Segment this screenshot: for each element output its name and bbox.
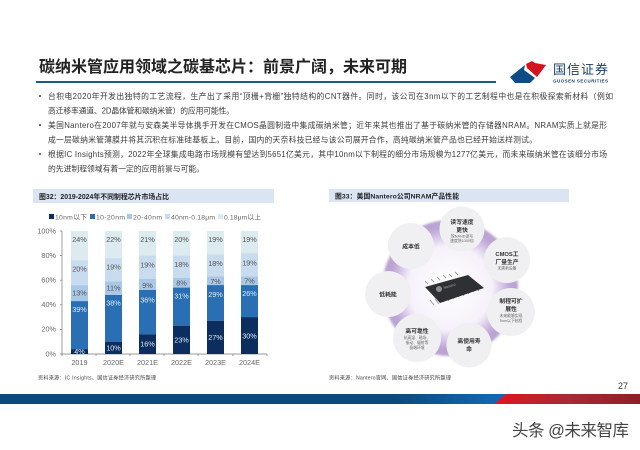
circle: process scalability: 未来能够实现 bbox=[500, 313, 523, 318]
title underline bbox=[36, 81, 496, 83]
diagram heading bbox=[329, 189, 569, 202]
bar: 2019: 13% bbox=[72, 288, 87, 298]
bar: 2022E: 8% bbox=[176, 278, 187, 288]
circle: high reliability: 振动、辐射等 bbox=[406, 340, 429, 345]
bar: 2024E: 26% bbox=[242, 289, 257, 298]
circle: read/write speed: 速度快1000倍 bbox=[450, 238, 474, 243]
circle: CMOS fab: 无需新设备 bbox=[498, 266, 517, 270]
circle: CMOS fab bbox=[484, 237, 530, 283]
logo: Guosen Securities: GUOSEN SECURITIES bbox=[553, 78, 608, 84]
bar: 2019: 24% bbox=[72, 235, 87, 244]
bar: 2023E: 7% bbox=[210, 277, 221, 286]
circle: process scalability: 制程可扩 bbox=[499, 297, 523, 305]
logo: Guosen Securities bbox=[510, 61, 608, 84]
circle: high reliability: 高可靠性 bbox=[405, 327, 429, 335]
bar: 2023E: 27% bbox=[208, 333, 223, 342]
bar: 2024E bbox=[241, 231, 258, 354]
legend: 0.18μm以上 bbox=[224, 212, 261, 222]
bar: 2020E: 19% bbox=[106, 262, 121, 272]
circle: read/write speed: 较NAND读写 bbox=[451, 234, 473, 238]
bar: 2019 bbox=[71, 231, 88, 356]
circle: long lifetime: 高使用寿 bbox=[457, 337, 481, 345]
bar: 2021E: 19% bbox=[140, 260, 155, 270]
bar: 2021E: 36% bbox=[140, 296, 155, 304]
circle: high reliability: 抗高温、磁场、 bbox=[404, 335, 430, 340]
bullet text block: 成一层碳纳米管薄膜并将其沉积在标准硅基板上。目前，国内的天奈科技已经与该公司展开合作，高纯碳纳米管产品也已经开始送样测试。 bbox=[48, 134, 537, 144]
y axis: 40% bbox=[41, 300, 57, 309]
bar: 2021E: 16% bbox=[140, 340, 155, 348]
purple glow bbox=[382, 220, 518, 356]
circle: low power: 低耗能 bbox=[379, 290, 397, 298]
icon: chip: Nantero bbox=[443, 282, 456, 290]
x axis: 2020E bbox=[103, 358, 124, 367]
bar: 2023E: 18% bbox=[208, 259, 223, 268]
bar: 2019: 20% bbox=[72, 264, 87, 274]
bar: 2021E bbox=[139, 231, 156, 354]
bar: 2022E: 31% bbox=[174, 292, 189, 300]
circle: long lifetime: 命 bbox=[466, 345, 472, 353]
bar: 2020E bbox=[105, 231, 122, 354]
circle: process scalability bbox=[487, 288, 535, 336]
circle: CMOS fab: 厂量生产 bbox=[495, 258, 519, 266]
x axis: 2021E bbox=[137, 358, 158, 367]
circle: CMOS fab: CMOS工 bbox=[495, 251, 519, 258]
y axis: 100% bbox=[37, 226, 57, 236]
circle: process scalability: 展性 bbox=[505, 305, 517, 313]
panel: NRAM diagram bbox=[329, 189, 569, 382]
x axis: 2023E bbox=[205, 358, 226, 367]
bar: 2019: 39% bbox=[72, 305, 87, 314]
bar: 2024E: 19% bbox=[242, 258, 257, 268]
x axis: 2019 bbox=[71, 358, 88, 367]
bullet text block: 根据IC Insights预测，2022年全球集成电路市场规模有望达到5651亿美元，其中10nm以下制程的细分市场规模为1277亿美元，而未来碳纳米管在该细分市场 bbox=[48, 149, 607, 159]
bar: 2021E: 9% bbox=[142, 281, 153, 290]
bar: 2023E: 29% bbox=[208, 290, 223, 299]
bar: 2023E: 19% bbox=[208, 235, 223, 244]
y axis: 60% bbox=[41, 276, 57, 284]
footer band bbox=[0, 394, 640, 404]
legend: 20-40nm bbox=[133, 214, 162, 222]
bar: 2020E: 10% bbox=[106, 344, 121, 352]
y axis: 20% bbox=[41, 324, 57, 334]
panel: chart 32 bbox=[33, 189, 274, 382]
logo: Guosen Securities: 国信证券 bbox=[553, 62, 608, 77]
circle: high reliability bbox=[393, 314, 441, 362]
y axis: 0% bbox=[45, 350, 57, 358]
x axis: 2024E bbox=[239, 358, 260, 367]
bullet text block bbox=[39, 91, 613, 174]
bullet text block: 美国Nantero在2007年就与安森美半导体携手开发在CMOS晶圆制造中集成碳纳米管；近年来其也推出了基于碳纳米管的存储器NRAM。NRAM实质上就是形 bbox=[48, 120, 607, 130]
watermark: 头条 @未来智库 bbox=[512, 421, 629, 440]
bar: 2022E: 20% bbox=[174, 235, 189, 244]
legend: 10nm以下 bbox=[55, 214, 87, 222]
bar: 2021E: 21% bbox=[140, 235, 155, 244]
page number: 27 bbox=[618, 381, 628, 391]
bar: 2019: 4% bbox=[74, 347, 85, 356]
y axis: 80% bbox=[41, 251, 57, 260]
chart heading bbox=[33, 189, 274, 203]
bullet text block: 的先进制程领域有着一定的应用前景与可能。 bbox=[48, 164, 204, 174]
bar: 2022E bbox=[173, 231, 190, 354]
circle: low power bbox=[365, 271, 411, 317]
circle: low cost bbox=[388, 223, 434, 269]
icon: chip bbox=[425, 272, 484, 305]
circle: read/write speed bbox=[440, 206, 484, 252]
circle: long lifetime bbox=[446, 322, 492, 368]
bar: 2020E: 11% bbox=[106, 284, 121, 292]
source note: 资料来源：Nantero官网、国信证券经济研究所整理 bbox=[329, 374, 452, 382]
bar: 2023E bbox=[207, 231, 224, 354]
bar: 2024E: 19% bbox=[242, 235, 257, 244]
circle: high reliability: 极端环境 bbox=[409, 345, 425, 350]
bar: 2022E: 18% bbox=[174, 260, 189, 269]
bar: 2020E: 38% bbox=[106, 298, 121, 308]
source note: 资料来源：IC Insights、国信证券经济研究所整理 bbox=[38, 374, 156, 382]
chart heading: 图32：2019-2024年不同制程芯片市场占比 bbox=[39, 192, 169, 201]
x axis: 2022E bbox=[171, 358, 192, 367]
diagram heading: 图33：美国Nantero公司NRAM产品性能 bbox=[335, 192, 459, 200]
bullet text block: 台积电2020年开发出独特的工艺流程，生产出了采用“顶栅+背栅”独特结构的CNT器件。同时，该公司在3nm以下的工艺制程中也是在积极探索新材料（例如 bbox=[48, 91, 613, 101]
legend bbox=[49, 212, 261, 222]
legend: 40nm-0.18μm bbox=[171, 214, 215, 222]
legend: 10-20nm bbox=[96, 214, 125, 222]
y axis bbox=[37, 226, 62, 358]
circle: low cost: 成本低 bbox=[402, 242, 420, 250]
circle: read/write speed: 更快 bbox=[456, 226, 468, 234]
circle: process scalability: 5nm以下制程 bbox=[500, 318, 522, 323]
x axis bbox=[60, 354, 267, 367]
title: 碳纳米管应用领域之碳基芯片：前景广阔，未来可期 bbox=[39, 57, 407, 76]
bar: 2024E: 7% bbox=[244, 276, 255, 286]
bullet text block: 高迁移率通道、2D晶体管和碳纳米管）的应用可能性。 bbox=[48, 106, 234, 116]
circle: read/write speed: 读写速度 bbox=[450, 218, 474, 226]
bar: 2022E: 23% bbox=[174, 336, 189, 344]
bar: 2024E: 30% bbox=[242, 332, 257, 340]
bar: 2020E: 22% bbox=[106, 235, 121, 244]
